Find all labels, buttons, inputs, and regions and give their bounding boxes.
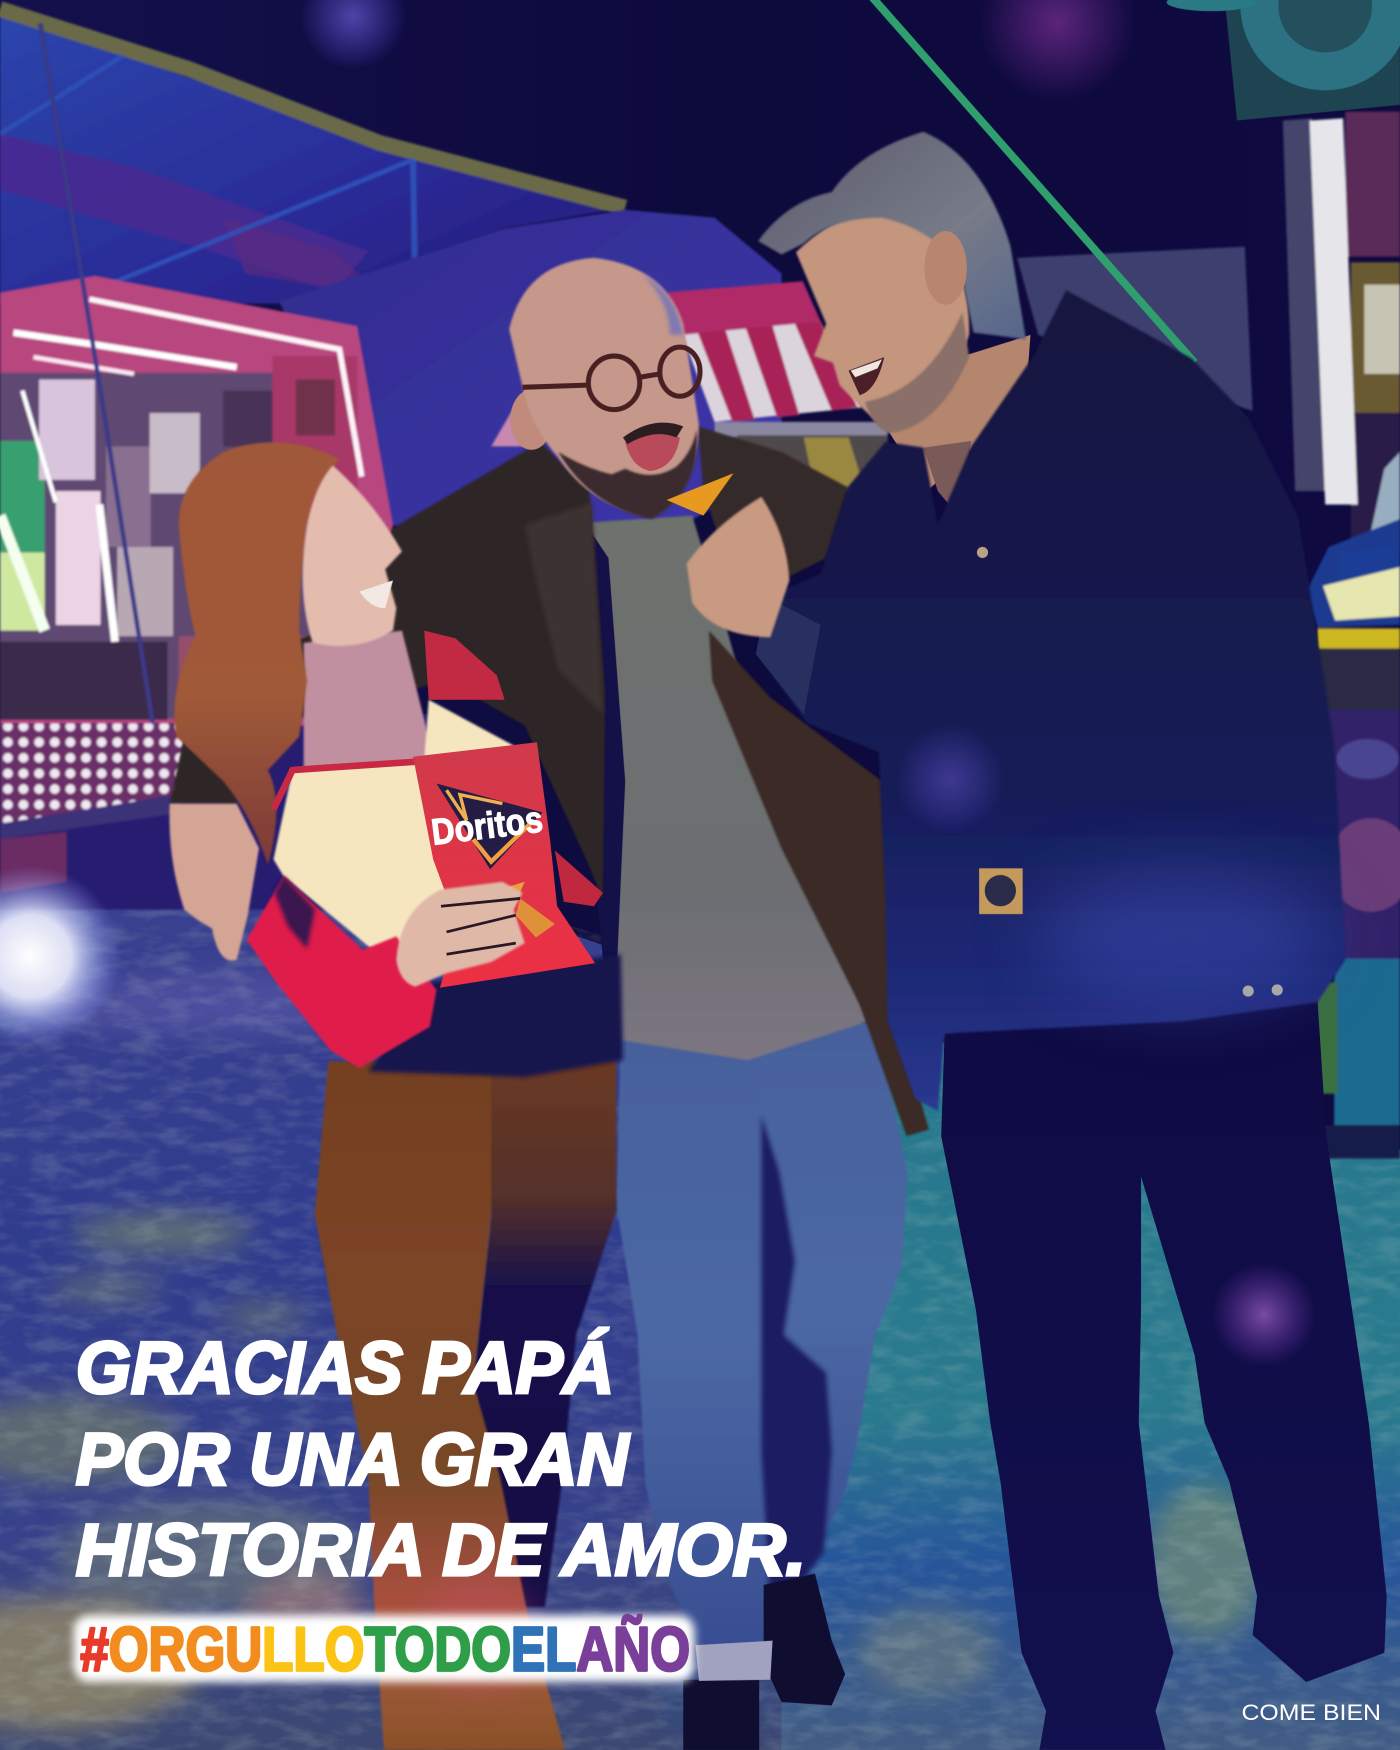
middle man sweater	[589, 516, 869, 1060]
woman red shoulder	[424, 631, 505, 700]
back wall	[279, 210, 781, 558]
background wall right	[1017, 247, 1253, 411]
bag body	[413, 742, 595, 988]
right man jacket	[756, 290, 1345, 1110]
woman hair	[174, 442, 339, 865]
striped awning	[491, 281, 888, 491]
headline: GRACIAS PAPÁ	[76, 1326, 614, 1409]
middle man jacket highlight	[525, 502, 603, 714]
man on the right	[687, 132, 1387, 1750]
middle man shadow beside jacket	[586, 525, 625, 982]
middle man moustache	[623, 423, 683, 444]
man in the middle	[170, 258, 929, 1750]
woman shirt body	[274, 700, 536, 960]
bag logo triangle	[437, 783, 543, 869]
middle man jacket left side and sleeve	[170, 442, 605, 900]
woman mouth	[359, 580, 393, 608]
woman neck	[304, 631, 435, 781]
right man hair	[758, 132, 1026, 339]
right man trousers	[941, 999, 1387, 1750]
right man face	[796, 209, 969, 430]
right man teeth	[851, 359, 882, 377]
right man beard	[865, 312, 969, 433]
right man jacket lower glow	[1038, 871, 1329, 1004]
right man jacket button	[977, 547, 988, 558]
middle man jacket lower lapel	[709, 631, 929, 1136]
carnival booth with neon frame	[0, 23, 447, 910]
woman fingers	[441, 898, 520, 954]
nacho chip	[667, 473, 733, 516]
middle man head	[509, 258, 699, 517]
middle man mouth	[625, 434, 680, 471]
headline: POR UNA GRAN	[76, 1417, 630, 1500]
headline	[76, 1326, 806, 1591]
middle man jean cuff	[696, 1641, 773, 1681]
woman red sleeve right	[555, 850, 603, 906]
right man jacket sleeve cuff	[756, 597, 821, 714]
middle man boots	[683, 1574, 845, 1750]
woman hand	[396, 882, 525, 987]
woman far trouser leg	[458, 1060, 616, 1607]
tent roof	[0, 9, 625, 304]
green rope	[870, 0, 1195, 363]
woman shirt neckline	[274, 761, 424, 809]
middle man jacket collar right	[698, 426, 848, 603]
headline: HISTORIA DE AMOR.	[76, 1508, 806, 1591]
hashtag: #ORGULLOTODOELAÑO	[80, 1614, 690, 1685]
middle man jeans	[616, 1021, 908, 1646]
right side booth	[1283, 112, 1400, 1158]
speaker	[1167, 0, 1400, 121]
right man neck	[888, 335, 1030, 491]
bag brand text: Doritos	[429, 799, 545, 853]
chip bag	[413, 742, 595, 988]
woman face	[303, 465, 402, 646]
woman	[169, 442, 623, 1750]
signature: come bien: COME BIEN	[1241, 1700, 1381, 1725]
right man shirt collar	[923, 441, 971, 517]
woman sleeve shadow	[275, 876, 315, 949]
woman red sleeve	[247, 876, 437, 1068]
middle man hand on shoulder	[169, 804, 259, 961]
middle man head shading	[642, 273, 683, 335]
right man jacket hem buttons	[1243, 984, 1283, 997]
middle man ear	[510, 390, 553, 450]
middle man beard	[558, 430, 697, 519]
bag chips	[482, 882, 525, 926]
waist shadow	[368, 954, 623, 1077]
right man mouth	[848, 357, 884, 395]
right man ear	[924, 231, 967, 305]
woman near trouser leg	[315, 1060, 565, 1750]
right man jacket patch	[979, 868, 1023, 914]
booth light panel	[0, 723, 190, 893]
middle man glasses	[522, 347, 700, 410]
right man hand	[687, 497, 789, 637]
